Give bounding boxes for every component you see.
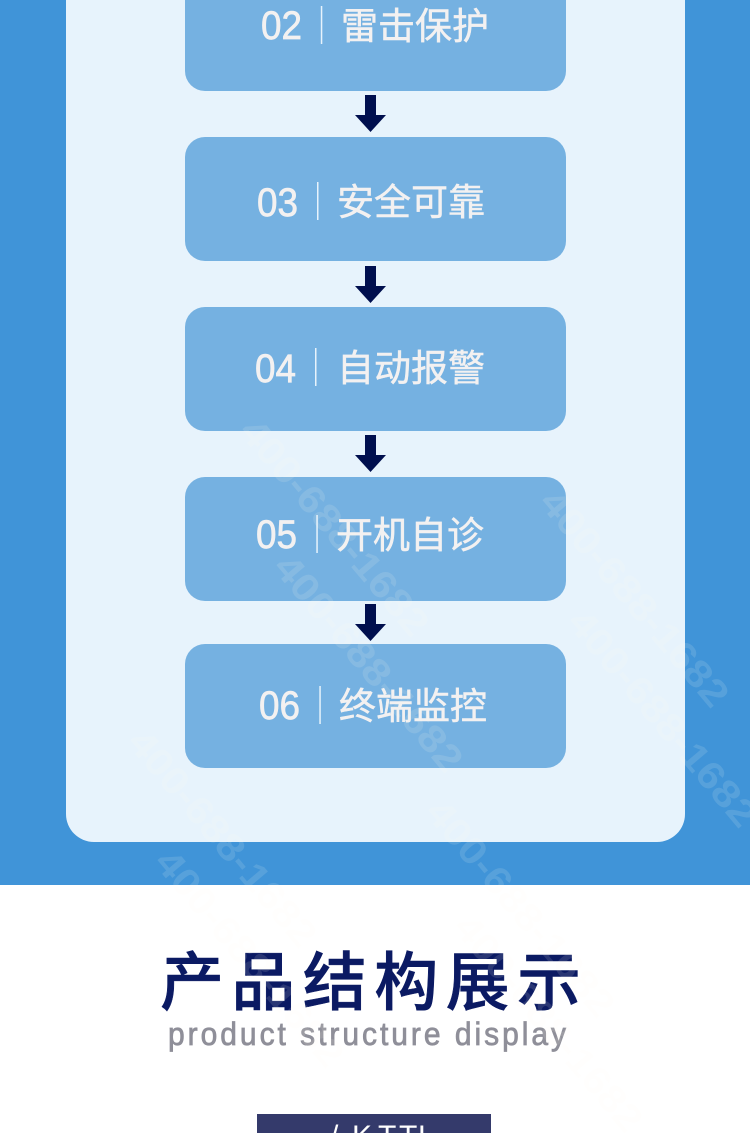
phone number watermarks: 400-688-1682 bbox=[445, 907, 651, 1133]
step 05 card: 05 bbox=[256, 513, 297, 557]
step 03 card: 03 bbox=[257, 181, 298, 225]
step 04 card bbox=[185, 307, 566, 431]
blue background band bbox=[0, 0, 750, 885]
panel: process steps bbox=[66, 0, 685, 842]
step 03 card: 安全可靠 bbox=[337, 182, 485, 223]
phone number watermarks: 400-688-1682 bbox=[265, 547, 471, 781]
phone number watermarks bbox=[119, 411, 750, 1133]
phone number watermarks: 400-688-1682 bbox=[146, 842, 352, 1076]
step 02 card: 雷击保护 bbox=[341, 6, 489, 47]
step 05 card bbox=[185, 477, 566, 601]
phone number watermarks: 400-688-1682 bbox=[417, 792, 623, 1026]
arrow: step 05 to 06 bbox=[355, 604, 386, 641]
section label bar, cut off at the bottom edge bbox=[257, 1114, 491, 1133]
arrow: step 04 to 05 bbox=[355, 435, 386, 472]
step 04 card: 04 bbox=[255, 347, 296, 391]
phone number watermarks: 400-688-1682 bbox=[531, 482, 737, 716]
step 06 card: 06 bbox=[259, 684, 300, 728]
arrow: step 03 to 04 bbox=[355, 266, 386, 303]
step 04 card: 自动报警 bbox=[337, 348, 485, 389]
heading: product structure display: 产品结构展示 bbox=[160, 947, 588, 1019]
step 05 card: 开机自诊 bbox=[336, 515, 484, 556]
arrow: step 02 to 03 bbox=[355, 95, 386, 132]
heading: product structure display: product structure display bbox=[168, 1016, 566, 1052]
heading: product structure display bbox=[160, 947, 588, 1052]
step 06 card: 终端监控 bbox=[339, 686, 487, 727]
phone number watermarks: 400-688-1682 bbox=[119, 722, 325, 956]
step 02 card: 02 bbox=[261, 4, 302, 48]
step 02 card bbox=[185, 0, 566, 91]
step 06 card bbox=[185, 644, 566, 768]
step 03 card bbox=[185, 137, 566, 261]
phone number watermarks: 400-688-1682 bbox=[231, 411, 437, 645]
phone number watermarks: 400-688-1682 bbox=[559, 602, 750, 836]
